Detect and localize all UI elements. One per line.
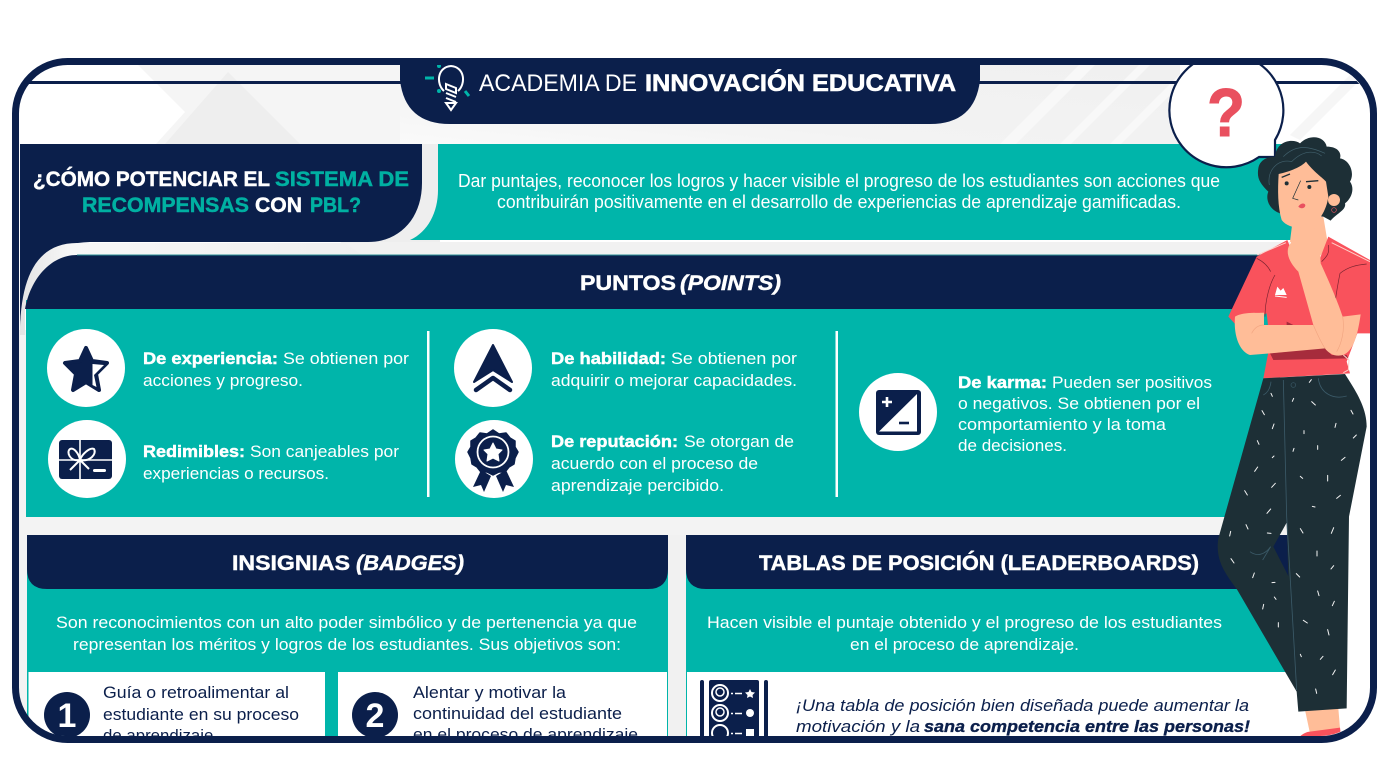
icon: badge — [455, 420, 533, 498]
puntos header — [25, 255, 1262, 309]
icon: half star — [47, 329, 125, 407]
tablas header — [686, 535, 1296, 589]
icon: plus minus — [859, 373, 937, 451]
text: de reputación: acuerdo con el proceso de — [551, 454, 758, 473]
text: de karma: comportamiento y la toma — [958, 415, 1167, 434]
text: redimibles: Son canjeables por — [250, 442, 399, 461]
card 1 text: estudiante en su proceso — [103, 705, 299, 724]
intro text: contribuirán positivamente en el desarrollo de experiencias de aprendizaje gamificadas. — [497, 192, 1181, 212]
text: redimibles — [143, 442, 399, 483]
header line — [15, 81, 1370, 84]
intro text: Dar puntajes, reconocer los logros y hacer visible el progreso de los estudiantes son acciones que — [458, 171, 1220, 191]
card 1 text — [104, 686, 298, 736]
title text: ¿CÓMO POTENCIAR EL — [33, 167, 270, 191]
pants specks — [1230, 380, 1356, 693]
text: de karma — [958, 373, 1212, 455]
logo text: INNOVACIÓN EDUCATIVA — [645, 69, 956, 97]
callout text — [796, 696, 1250, 736]
text: de reputación: aprendizaje percibido. — [551, 476, 724, 495]
icon: light bulb — [425, 65, 469, 110]
text: redimibles: Redimibles: — [143, 442, 245, 461]
panel: intro — [410, 144, 1300, 240]
tablas heading: TABLAS DE POSICIÓN (LEADERBOARDS) — [759, 551, 1199, 575]
text: de karma: de decisiones. — [958, 436, 1067, 455]
title text: SISTEMA DE — [275, 168, 409, 191]
callout text: sana competencia entre las personas! — [924, 717, 1250, 736]
panel: tablas — [686, 535, 1296, 741]
number 2 — [352, 692, 398, 738]
text: de experiencia — [143, 349, 409, 390]
logo text — [479, 69, 956, 92]
icon: leaderboard — [700, 680, 768, 741]
foot — [1305, 708, 1340, 733]
panel: puntos — [25, 254, 1280, 517]
card 2 text: continuidad del estudiante — [413, 704, 622, 723]
text: de karma: De karma: — [958, 373, 1047, 392]
insignias description: representan los méritos y logros de los estudiantes. Sus objetivos son: — [73, 635, 621, 654]
insignias heading — [232, 552, 464, 575]
text: de reputación — [551, 432, 794, 495]
card 1 — [27, 672, 298, 736]
character: thinking person — [1218, 137, 1373, 740]
number 1: 1 — [58, 697, 76, 735]
text: de reputación: De reputación: — [551, 432, 678, 451]
callout text: ¡Una tabla de posición bien diseñada puede aumentar la — [796, 696, 1249, 715]
number 2: 2 — [366, 697, 384, 735]
text: redimibles: experiencias o recursos. — [143, 464, 329, 483]
text: de reputación: Se otorgan de — [684, 432, 794, 451]
puntos heading: (POINTS) — [680, 272, 781, 295]
insignias heading: INSIGNIAS — [232, 552, 350, 575]
insignias heading: (BADGES) — [356, 552, 464, 575]
neck — [1290, 217, 1328, 263]
text: de habilidad: De habilidad: — [551, 349, 666, 368]
face — [1278, 162, 1328, 228]
shoe — [1297, 728, 1342, 740]
number 1 — [44, 692, 90, 738]
swoosh behind points panel — [20, 243, 362, 335]
logo text: ACADEMIA DE — [479, 70, 637, 97]
card 2 text: Alentar y motivar la — [413, 683, 567, 702]
text: de karma: o negativos. Se obtienen por el — [958, 394, 1200, 413]
tablas description — [707, 613, 1222, 654]
text: de habilidad: Se obtienen por — [671, 349, 797, 368]
shirt — [1228, 237, 1373, 378]
title text — [33, 167, 409, 217]
question mark: ? — [1207, 75, 1245, 151]
title text: RECOMPENSAS — [82, 194, 249, 217]
puntos heading: PUNTOS — [580, 272, 676, 295]
panel: insignias — [27, 535, 668, 745]
intro text — [458, 171, 1220, 212]
pants — [1218, 374, 1367, 712]
logo banner — [400, 60, 980, 124]
hair — [1258, 137, 1352, 221]
text: de experiencia: De experiencia: — [143, 349, 278, 368]
callout text: motivación y la — [796, 717, 920, 736]
card 1 text: Guía o retroalimentar al — [103, 683, 289, 702]
insignias description: Son reconocimientos con un alto poder simbólico y de pertenencia ya que — [56, 613, 637, 632]
card 2 text: en el proceso de aprendizaje — [413, 725, 638, 744]
title text: PBL? — [310, 194, 361, 217]
card 2 text — [413, 686, 638, 736]
tablas description: Hacen visible el puntaje obtenido y el progreso de los estudiantes — [707, 613, 1222, 632]
card 2 — [327, 672, 668, 736]
tablas description: en el proceso de aprendizaje. — [850, 635, 1079, 654]
text: de karma: Pueden ser positivos — [1052, 373, 1212, 392]
person lower body — [1218, 374, 1367, 740]
insignias header — [27, 535, 668, 589]
icon: arrow up — [454, 329, 532, 407]
person upper body — [1228, 137, 1373, 378]
arm and hand — [1235, 218, 1361, 356]
callout card — [686, 672, 1250, 736]
icon: gift card — [48, 420, 126, 498]
panel: title — [20, 144, 422, 335]
puntos heading — [580, 272, 781, 295]
speech bubble — [1169, 53, 1283, 167]
text: de habilidad: adquirir o mejorar capacidades. — [551, 371, 797, 390]
text: de experiencia: Se obtienen por — [283, 349, 409, 368]
title text: CON — [255, 194, 302, 217]
text: de experiencia: acciones y progreso. — [143, 371, 303, 390]
card 1 text: de aprendizaje. — [103, 726, 218, 745]
insignias description — [56, 613, 637, 654]
text: de habilidad — [551, 349, 797, 390]
